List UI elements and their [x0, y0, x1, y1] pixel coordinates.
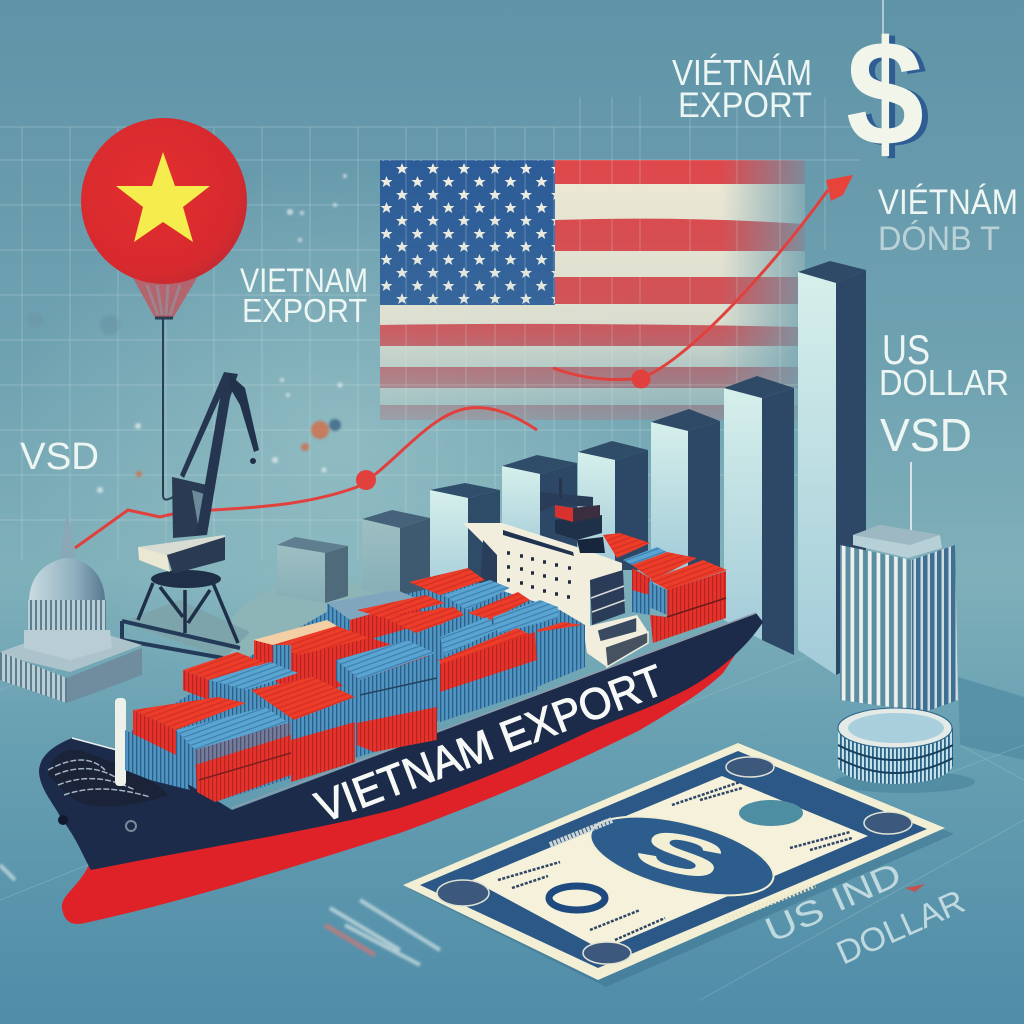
label: Vietnam export top — [672, 52, 812, 125]
red trend line — [75, 175, 853, 548]
arrow head — [826, 175, 853, 201]
capitol base — [0, 625, 142, 672]
crane ring — [151, 570, 221, 588]
bar 2 — [362, 510, 430, 597]
label: VSD right: VSD — [880, 409, 972, 461]
containers: mid red and blue right — [440, 628, 537, 722]
crane jib — [228, 373, 259, 452]
crane — [122, 372, 259, 658]
bridge steps — [597, 617, 637, 642]
label: Vietnam dong — [878, 183, 1018, 258]
crane cab — [172, 477, 207, 538]
bar 5 — [578, 441, 648, 570]
containers: upper left row — [253, 620, 374, 680]
flag canton — [380, 160, 555, 305]
balloon string — [163, 318, 173, 500]
trend point — [356, 470, 376, 490]
funnel — [555, 515, 602, 540]
crane legs — [138, 583, 238, 643]
bar 4 — [502, 455, 577, 560]
dollar bill — [403, 743, 954, 987]
flag: United States — [380, 160, 805, 420]
bar 7 — [724, 376, 794, 655]
icon: dollar sign: $ — [846, 9, 924, 177]
hull: red waterline — [62, 640, 745, 924]
crane hook — [250, 458, 256, 464]
label: VSD left: VSD — [20, 436, 99, 478]
balloon neck — [133, 278, 197, 318]
containers: left low tier — [125, 652, 355, 802]
label: US dollar — [879, 326, 1009, 403]
tower top — [853, 525, 942, 558]
bridge wing and body — [463, 523, 648, 667]
label: Vietnam export top: VIÉTNÁM — [672, 52, 812, 93]
blurred reflection marks — [0, 865, 440, 965]
label: US IND dollar: US — [759, 890, 830, 950]
ship windows — [507, 553, 571, 597]
crane box — [138, 535, 225, 574]
hull: dark side — [39, 613, 763, 870]
bill fine print — [498, 782, 852, 940]
bill border — [420, 751, 927, 968]
label: US IND dollar — [759, 855, 970, 971]
crane platform — [122, 600, 250, 658]
trend point — [632, 370, 650, 388]
bar 8 — [798, 261, 866, 675]
text labels — [20, 52, 1018, 478]
cargo ship — [39, 478, 763, 924]
bar chart — [277, 261, 866, 675]
tower left face — [840, 545, 912, 710]
capitol building — [0, 518, 142, 703]
top coin — [838, 708, 952, 748]
ship superstructure — [463, 478, 648, 667]
bar 6 — [651, 409, 720, 570]
tower antenna — [910, 462, 912, 530]
label: Vietnam export middle: VIETNAM — [240, 262, 368, 300]
bill center letter: S — [622, 817, 739, 893]
bar 1 — [277, 537, 348, 603]
office tower — [840, 462, 958, 712]
coin stack — [835, 708, 975, 793]
balloon with Vietnam flag — [81, 118, 247, 500]
bar 3 — [430, 483, 500, 600]
capitol lantern — [60, 518, 75, 558]
balloon body — [81, 118, 247, 284]
bridge window strip — [503, 530, 574, 556]
decorative specks — [27, 174, 347, 493]
label: Vietnam dong: DÓNB T — [878, 220, 1000, 258]
tower right face — [912, 545, 958, 712]
containers: base mass — [125, 580, 585, 802]
icon: dollar sign: $ — [852, 11, 930, 179]
bill center oval — [583, 801, 781, 911]
label: Vietnam export middle — [240, 262, 368, 329]
capitol drum — [28, 600, 106, 632]
bow mast — [115, 698, 126, 786]
containers: upper back row — [327, 568, 558, 675]
bill corner seals — [437, 757, 912, 964]
containers: stern stack — [603, 533, 727, 643]
containers: far right middle — [537, 622, 585, 687]
bill inner — [472, 776, 868, 950]
label: Vietnam export middle: EXPORT — [242, 292, 367, 329]
yellow star — [116, 152, 210, 242]
bridge tower dark panel — [590, 570, 625, 625]
bill left seal — [549, 886, 605, 910]
crane arm — [180, 372, 238, 535]
right floor shadow — [958, 677, 1024, 760]
bill right seal — [739, 800, 803, 826]
label: US dollar: US — [882, 326, 930, 373]
capitol dome — [29, 558, 105, 600]
containers: mid tall blue — [336, 640, 437, 752]
ship name: VIETNAM EXPORT — [309, 656, 671, 832]
bow deck — [48, 750, 168, 807]
label: US IND dollar: DOLLAR — [831, 882, 970, 971]
anchor port — [126, 821, 136, 831]
label: US IND dollar: IND — [826, 855, 907, 919]
label: US dollar: DOLLAR — [879, 362, 1009, 403]
label: Vietnam export top: EXPORT — [678, 86, 812, 125]
bill paper — [403, 743, 945, 980]
background grid — [0, 97, 860, 560]
pale floor mound — [215, 578, 440, 660]
